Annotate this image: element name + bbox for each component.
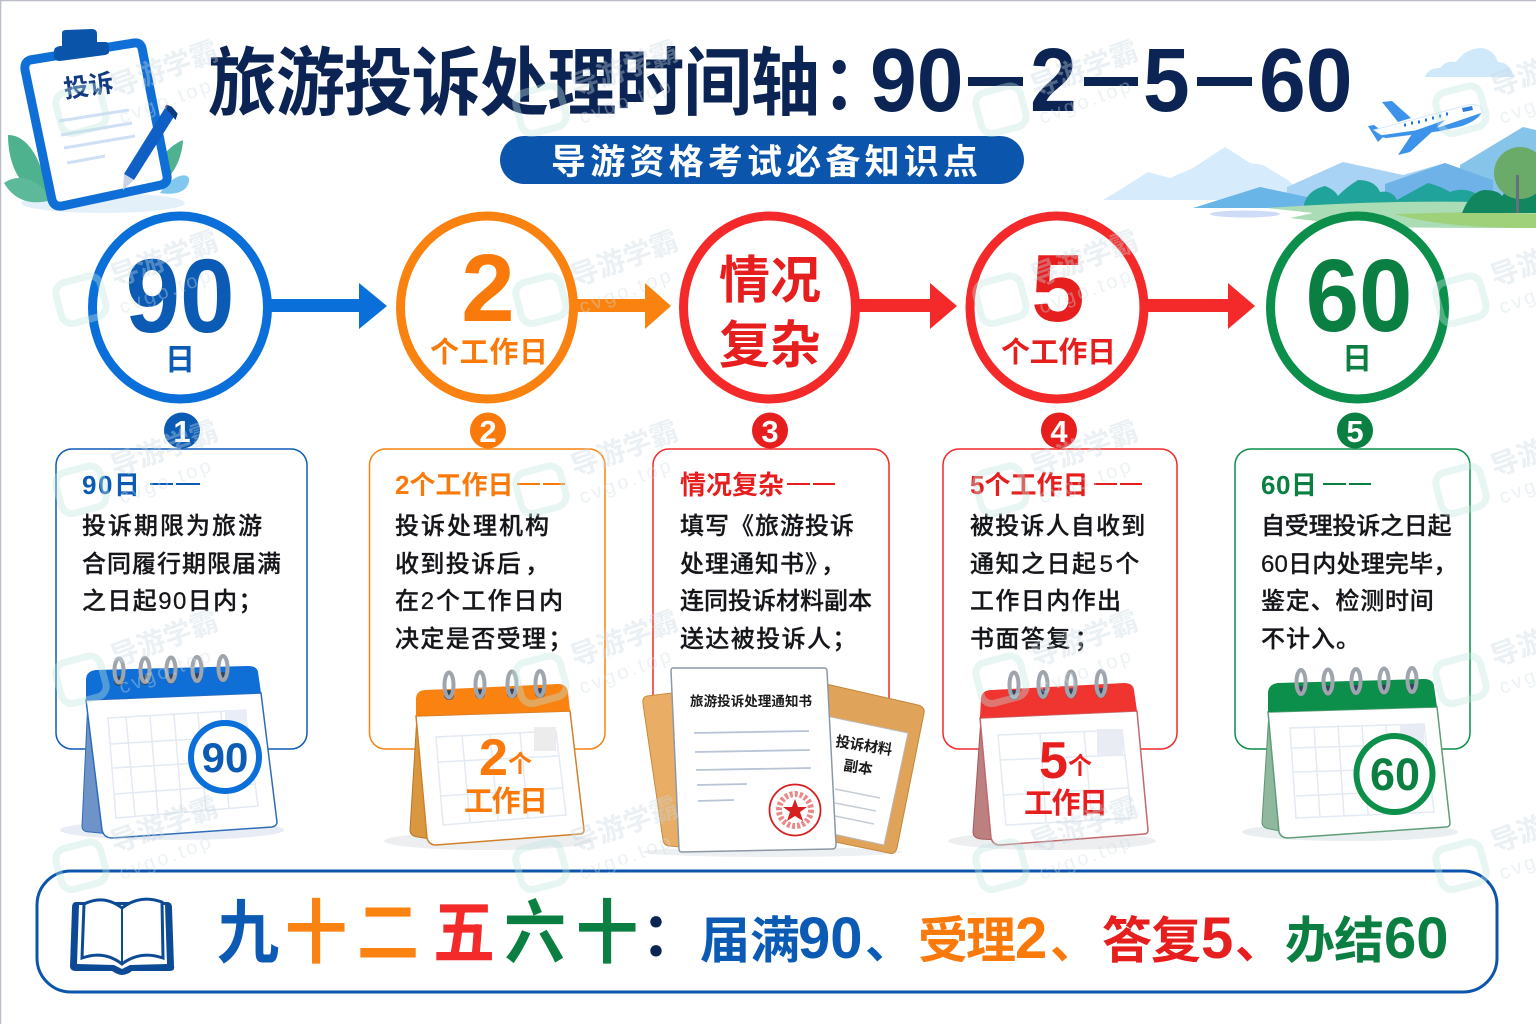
number badge 4: 4 <box>1050 414 1068 449</box>
mnemonic: accept 2 <box>918 906 1098 971</box>
watermarks: cvgo.top <box>116 265 214 319</box>
icon: calendar 90: 90 <box>202 734 248 781</box>
body text: 填写《旅游投诉 <box>680 513 855 540</box>
number badge 3 <box>752 412 788 449</box>
summary frame <box>37 871 1497 992</box>
mnemonic heading: ： <box>641 902 701 969</box>
mnemonic: expiry 90: 、 <box>865 916 913 969</box>
icon: calendar 2 working days: 2 <box>479 729 508 787</box>
watermarks: cvgo.top <box>116 75 214 129</box>
body text: 60日内处理完毕， <box>1261 551 1458 578</box>
body text: 工作日内作出 <box>970 588 1122 615</box>
illustration: notice document and complaint copy: 副本 <box>842 757 874 779</box>
watermarks: cvgo.top <box>576 75 674 129</box>
card frame <box>943 449 1177 749</box>
step circle: complicated cases: 复杂 <box>719 317 821 374</box>
icon: open book <box>70 899 174 975</box>
body text: 不计入。 <box>1261 626 1361 653</box>
icon: calendar 5 working days <box>948 671 1156 850</box>
body text: 鉴定、检测时间 <box>1261 588 1435 615</box>
body text: 在2个工作日内 <box>395 588 565 615</box>
body text <box>82 513 282 615</box>
heading: 5个工作日 <box>970 470 1088 500</box>
body text: 之日起90日内； <box>82 588 264 615</box>
mnemonic heading: 五 <box>433 894 495 972</box>
watermarks: cvgo.top <box>116 831 214 885</box>
mnemonic: close 60: 办结 <box>1285 913 1384 969</box>
step circle: complicated cases <box>684 216 856 399</box>
icon: complaint clipboard with pen: 投诉 <box>62 69 115 104</box>
watermarks: 导游学霸 <box>106 35 222 103</box>
icon: calendar 2 working days: 个 <box>508 751 532 778</box>
arrow 3 <box>858 283 957 329</box>
body text: 通知之日起5个 <box>970 551 1141 578</box>
illustration: notice document and complaint copy: 投诉材料 <box>834 732 894 759</box>
body text <box>1261 513 1458 653</box>
watermarks: 导游学霸 <box>566 791 682 859</box>
icon: red stamp <box>770 784 820 836</box>
watermarks: cvgo.top <box>1036 455 1134 509</box>
arrow 2 <box>576 283 671 329</box>
timeline <box>92 216 1444 399</box>
watermarks: cvgo.top <box>1036 265 1134 319</box>
watermarks: 导游学霸 <box>1026 605 1142 673</box>
mnemonic: reply 5: 5 <box>1201 906 1233 971</box>
body text <box>970 513 1146 653</box>
mnemonic: accept 2: 、 <box>1050 916 1098 969</box>
mnemonic: expiry 90: 届满 <box>700 913 800 969</box>
panel: step 3 <box>642 412 924 857</box>
watermarks: 导游学霸 <box>106 605 222 673</box>
watermarks: cvgo.top <box>576 265 674 319</box>
step circle: 60 days: 60 <box>1306 239 1412 354</box>
card frame <box>370 449 605 749</box>
title: 90 <box>870 30 963 131</box>
mnemonic: expiry 90: 90 <box>798 906 863 971</box>
step circle: 5 working days: 5 <box>1031 235 1085 342</box>
arrow 1 <box>270 283 387 329</box>
step circle: 5 working days <box>970 216 1144 399</box>
mnemonic: close 60 <box>1285 906 1449 971</box>
panel: step 1 <box>56 412 307 840</box>
step circle: 2 working days: 个工作日 <box>430 336 548 369</box>
body text: 连同投诉材料副本 <box>680 588 872 615</box>
panel: step 4 <box>943 412 1177 850</box>
icon: calendar 5 working days: 个 <box>1068 753 1092 780</box>
step circle: 5 working days: 个工作日 <box>1001 336 1116 369</box>
heading <box>82 470 200 500</box>
step circle: 2 working days <box>400 216 574 399</box>
arrow 4 <box>1146 283 1255 329</box>
step circle: 60 days <box>1270 216 1444 399</box>
body text: 投诉处理机构 <box>395 513 551 540</box>
body text: 收到投诉后， <box>395 551 550 578</box>
icon: calendar 2 working days <box>384 671 592 850</box>
heading: 90日 <box>82 470 141 500</box>
title: 5 <box>1143 30 1190 131</box>
watermarks: 导游学霸 <box>1026 35 1142 103</box>
watermarks: 导游学霸 <box>566 605 682 673</box>
watermarks: 导游学霸 <box>566 35 682 103</box>
watermarks: cvgo.top <box>576 645 674 699</box>
title <box>208 30 1352 131</box>
watermarks: 导游学霸 <box>1026 415 1142 483</box>
icon: calendar 90 <box>60 656 284 840</box>
step circle: 90 days: 90 <box>126 237 234 355</box>
title: 旅游投诉处理时间轴 <box>208 43 820 126</box>
watermarks: cvgo.top <box>1036 645 1134 699</box>
watermarks: cvgo.top <box>576 455 674 509</box>
watermarks: cvgo.top <box>1036 831 1134 885</box>
step circle: 60 days: 日 <box>1342 343 1372 376</box>
illustration: notice document and complaint copy <box>642 668 924 857</box>
mnemonic: accept 2: 受理 <box>918 913 1016 969</box>
watermarks: cvgo.top <box>116 455 214 509</box>
icon: calendar 60: 60 <box>1370 749 1420 800</box>
number badge 5 <box>1337 412 1373 449</box>
body text: 投诉期限为旅游 <box>82 513 264 540</box>
subtitle pill: 导游资格考试必备知识点 <box>551 143 978 182</box>
mnemonic heading: 二 <box>357 894 419 972</box>
title: ： <box>822 43 891 126</box>
title: 60 <box>1259 30 1352 131</box>
number badge 2 <box>470 412 506 449</box>
watermarks: cvgo.top <box>1036 75 1134 129</box>
panel: mnemonic summary <box>37 871 1497 992</box>
icon: airplane <box>1368 101 1482 155</box>
body text: 决定是否受理； <box>395 626 574 653</box>
body text <box>680 513 872 653</box>
number badge 1 <box>164 412 200 449</box>
icon: calendar 5 working days: 5 <box>1039 732 1068 790</box>
number badge 2: 2 <box>479 414 497 449</box>
panel: step 2 <box>370 412 605 850</box>
watermarks: cvgo.top <box>116 645 214 699</box>
watermarks: 导游学霸 <box>106 791 222 859</box>
number badge 3: 3 <box>761 414 779 449</box>
mnemonic heading <box>217 894 701 972</box>
panel: step 5 <box>1235 412 1470 841</box>
heading: 情况复杂 <box>680 470 784 500</box>
body text: 送达被投诉人； <box>680 626 858 653</box>
body text: 书面答复； <box>970 626 1100 653</box>
card frame <box>56 449 307 749</box>
heading: 2个工作日 <box>395 470 513 500</box>
watermarks: 导游学霸 <box>566 415 682 483</box>
mnemonic heading: 六 <box>504 894 566 972</box>
body text: 被投诉人自收到 <box>970 513 1146 540</box>
number badge 4 <box>1041 412 1077 449</box>
icon: calendar 2 working days: 工作日 <box>464 785 548 818</box>
body text: 合同履行期限届满 <box>82 551 282 578</box>
mnemonic: close 60: 60 <box>1384 906 1449 971</box>
watermarks: cvgo.top <box>576 831 674 885</box>
number badge 1: 1 <box>173 414 191 449</box>
body text: 处理通知书》， <box>680 551 846 578</box>
icon: complaint clipboard with pen <box>4 29 189 213</box>
mnemonic: reply 5: 、 <box>1235 916 1283 969</box>
mnemonic heading: 九 <box>217 894 279 972</box>
watermarks: 导游学霸 <box>1026 225 1142 293</box>
mnemonic: accept 2: 2 <box>1015 906 1047 971</box>
card frame <box>653 449 889 749</box>
body text <box>395 513 574 653</box>
watermarks: 导游学霸 <box>106 225 222 293</box>
mnemonic: expiry 90 <box>700 906 913 971</box>
step circle: 90 days <box>92 216 268 399</box>
subtitle pill <box>500 136 1024 184</box>
icon: calendar 60 <box>1242 668 1458 841</box>
heading <box>1261 470 1371 500</box>
number badge 5: 5 <box>1346 414 1364 449</box>
illustration: landscape with airplane <box>1103 48 1536 228</box>
watermarks: 导游学霸 <box>1026 791 1142 859</box>
watermarks: 导游学霸 <box>106 415 222 483</box>
body text: 自受理投诉之日起 <box>1261 513 1452 540</box>
mnemonic heading: 十 <box>285 894 347 972</box>
mnemonic: reply 5 <box>1102 906 1283 971</box>
step circle: complicated cases: 情况 <box>719 252 821 309</box>
step circle: 90 days: 日 <box>165 344 195 377</box>
mnemonic: reply 5: 答复 <box>1102 913 1201 969</box>
illustration: notice document and complaint copy: 旅游投诉处理通知书 <box>690 693 812 709</box>
step circle: 2 working days: 2 <box>461 235 515 342</box>
card frame <box>1235 449 1470 749</box>
icon: calendar 5 working days: 工作日 <box>1024 787 1108 820</box>
watermarks: 导游学霸 <box>566 225 682 293</box>
heading: 60日 <box>1261 470 1317 500</box>
mnemonic heading: 十 <box>576 894 638 972</box>
title: 2 <box>1030 30 1077 131</box>
